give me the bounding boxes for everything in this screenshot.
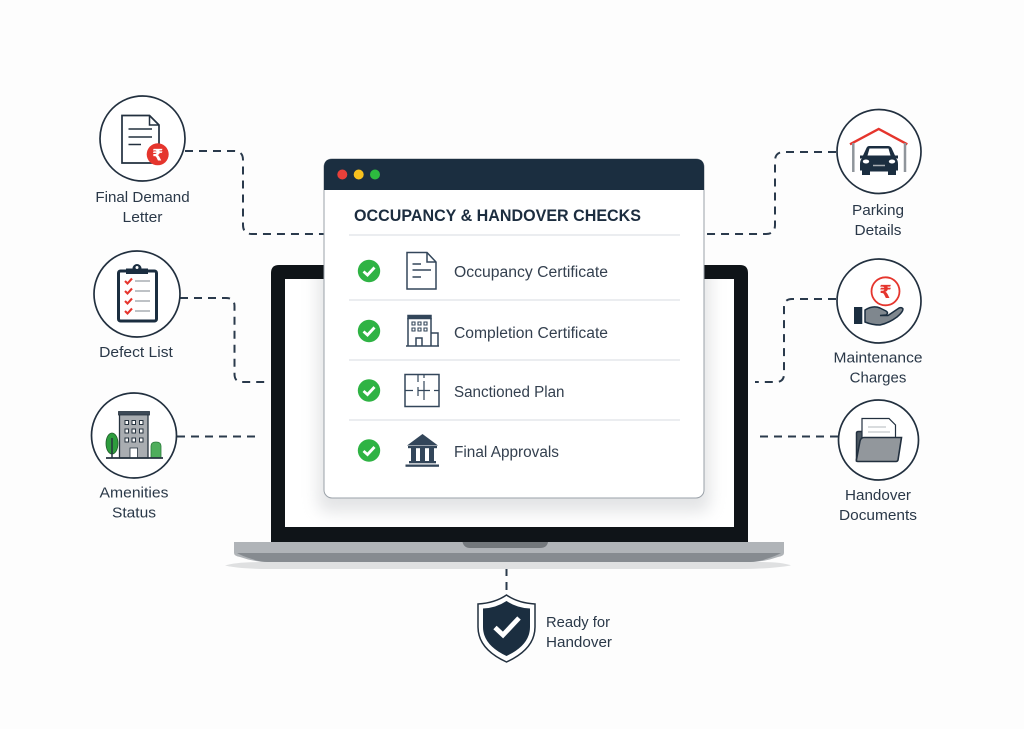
window title bar [324,159,704,190]
connector: defect list [180,298,265,382]
icon: building [406,316,439,346]
icon: demand letter: ₹ [152,145,163,164]
window dot green [370,170,380,180]
label: Occupancy Certificate [454,264,608,281]
row: final approvals [358,434,559,467]
label: Details [854,222,902,239]
window shadow [314,279,714,516]
connector: final demand letter [185,151,324,234]
label: Completion Certificate [454,325,608,342]
item: parking details [837,110,921,239]
icon: shield [478,595,535,662]
connector: handover documents [757,436,838,438]
check icon [358,379,380,402]
label: Maintenance [834,350,922,367]
label: Charges [850,370,906,387]
check icon [358,260,380,282]
connector: parking details [704,152,836,234]
label: Sanctioned Plan [454,384,564,401]
check icon [358,320,380,342]
label: Handover [845,487,911,504]
ring [92,393,176,478]
ring [100,96,185,181]
ring [94,251,180,337]
item: amenities status [92,393,176,522]
connector: ready for handover [506,568,508,593]
label: Letter [122,209,163,226]
row: occupancy certificate [358,252,608,289]
item: defect list [94,251,180,361]
icon: car under roof [850,129,907,175]
item: ready for handover [478,595,612,662]
laptop base [234,542,784,562]
label: Final Demand [95,189,190,206]
label: Ready for [546,614,610,631]
laptop screen [285,279,734,527]
ring [837,259,921,343]
label: Documents [839,507,917,524]
window dot yellow [354,170,364,180]
icon: document [407,252,436,289]
icon: rupee in hand: ₹ [879,282,892,303]
ring [837,110,921,194]
icon: floor plan [405,374,439,406]
ring [838,400,918,480]
label: Final Approvals [454,444,559,461]
check icon [358,439,380,462]
connector: amenities status [177,436,260,438]
laptop lid [271,265,748,543]
label: Handover [546,634,612,651]
window body [324,159,704,498]
panel: checklist window [324,159,704,498]
icon: folder [856,418,902,462]
label: Defect List [99,344,174,361]
item: final demand letter [95,96,190,226]
laptop shadow [225,562,791,569]
icon: clipboard [118,264,156,321]
window dot red [337,170,347,180]
connector: maintenance charges [755,299,836,382]
icon: building and trees [106,412,163,458]
heading: OCCUPANCY & HANDOVER CHECKS [354,207,641,225]
laptop base front [237,553,781,562]
row: sanctioned plan [358,374,564,406]
row: completion certificate [358,316,608,346]
item: maintenance charges [834,259,922,387]
icon: government building [406,434,439,467]
label: Amenities [100,484,168,502]
label: Parking [852,202,904,219]
label: Status [112,504,156,522]
laptop [225,265,791,569]
laptop notch [462,542,548,548]
item: handover documents [838,400,918,524]
